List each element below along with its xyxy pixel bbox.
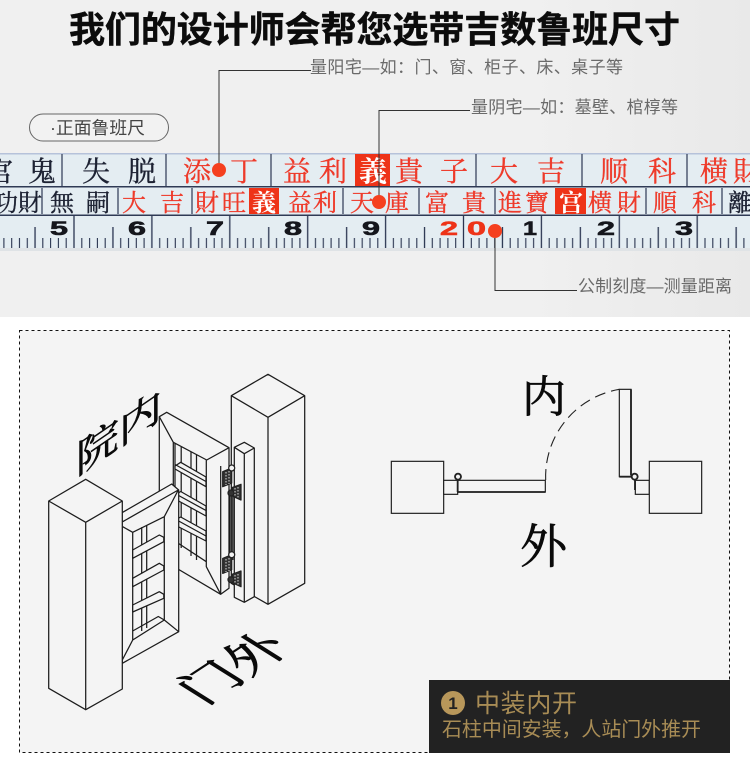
plan view of door [391,389,702,513]
post [234,442,254,602]
ruler top row characters [0,156,750,188]
label: inside courtyard: 院内 [76,383,162,485]
upper door leaf [159,412,229,594]
callout: yin house [372,98,678,209]
ruler digits: 7 [206,219,224,240]
callout: metric scale [488,224,732,296]
ruler bottom row characters: 大吉財旺益利天庫富貴進寶横財順科 [122,190,716,217]
ruler [0,153,750,251]
ruler top row characters: 義 [359,156,387,188]
number badge [441,691,465,715]
ruler red seal boxes [249,154,586,214]
hinge rod [230,495,233,560]
upper door rails [175,462,206,541]
right pillar plan [649,461,702,513]
tag: front luban ruler: ·正面鲁班尺 [50,118,145,138]
callout: yang house: 量阳宅—如：门、窗、柜子、床、桌子等 [310,58,623,77]
panel: door diagram [20,330,730,752]
callout: yang house [212,58,623,177]
ruler top row characters: 添丁益利 [183,156,347,188]
ruler digits: 3 [675,219,693,240]
swing arc [546,389,619,480]
ruler ticks [0,215,750,248]
ruler digits: 6 [128,219,146,240]
right door leaf plan [619,389,649,494]
lower door rails [133,535,164,612]
callout: metric scale: 公制刻度—测量距离 [578,277,732,296]
ruler digits: 2 [440,219,458,240]
ruler bottom row characters: 宫 [559,189,583,217]
callout: yin house: 量阴宅—如：墓壁、棺椁等 [471,98,678,117]
ruler digits [50,219,693,240]
left pillar plan [391,461,444,513]
tag: front luban ruler [30,114,168,141]
ruler digits: 2 [597,219,615,240]
ruler digits: 5 [50,219,69,240]
label: inside: 内 [522,373,566,422]
label: outside door: 门外 [167,624,303,712]
left door leaf plan [444,474,545,494]
ruler digits: 8 [284,219,302,240]
left pillar [49,479,122,710]
ruler digits: 9 [362,219,380,240]
right pillar [231,374,305,604]
isometric door drawing [49,374,305,710]
caption text: 石柱中间安装，人站门外推开 [442,718,701,741]
ruler digits: 0 [467,219,486,240]
label: outside: 外 [520,522,568,574]
caption heading: 中装内开 [475,690,577,718]
hinges [223,465,241,587]
caption box [429,680,730,753]
ruler digits: 1 [523,219,538,240]
ruler bottom row characters: 義 [252,190,276,217]
lower door leaf [122,484,179,663]
title: 我们的设计师会帮您选带吉数鲁班尺寸 [69,9,680,50]
number badge: 1 [448,694,458,713]
